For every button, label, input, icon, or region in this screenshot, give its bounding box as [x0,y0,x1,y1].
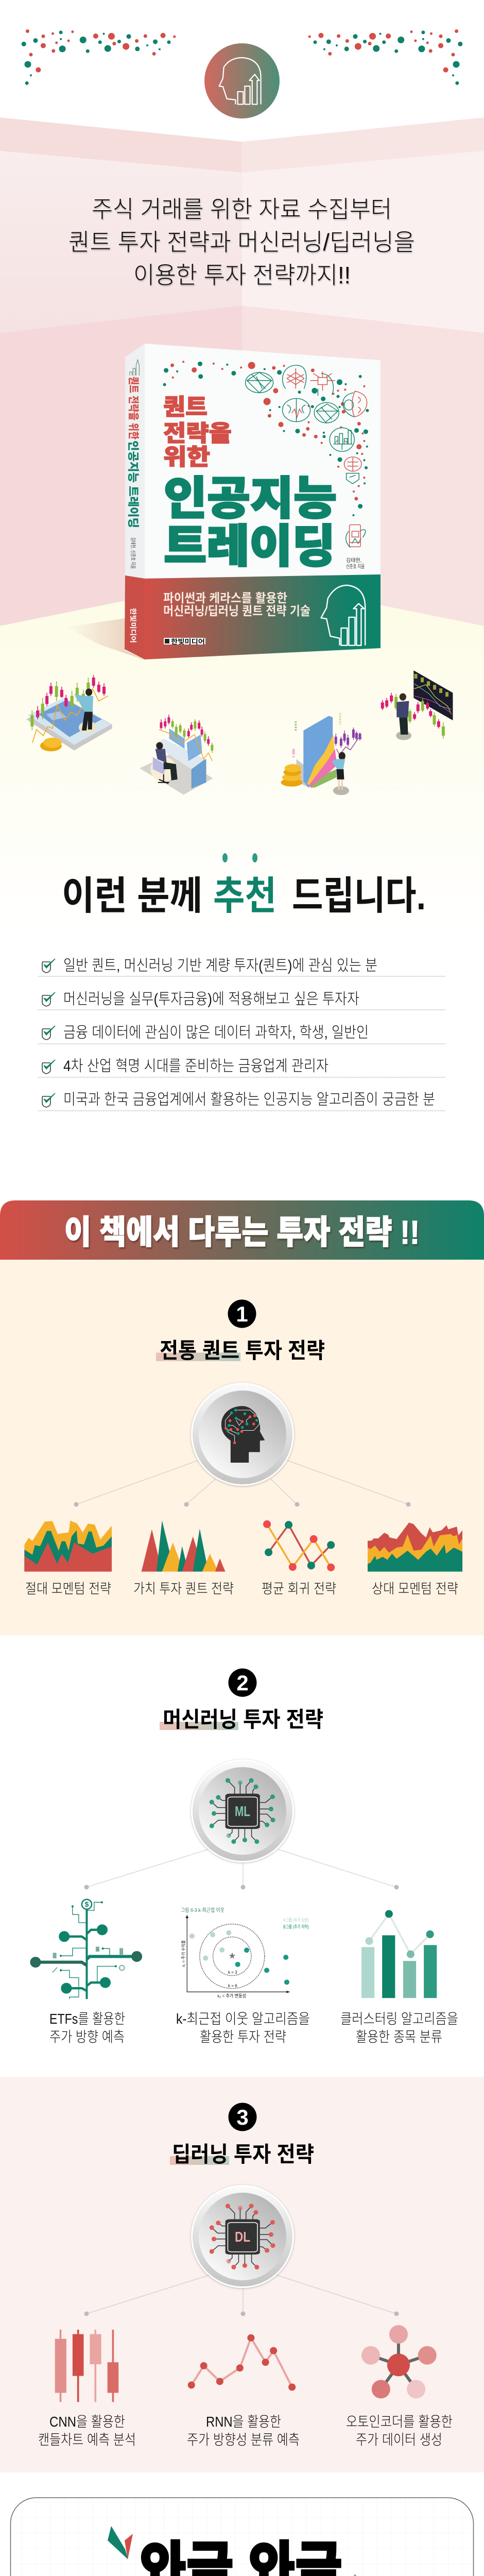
number badge 3 [229,2103,256,2131]
cover title: 위한 [163,445,210,470]
banner heading: 이 책에서 다루는 투자 전략 !! [64,1214,420,1251]
number badge 1: 1 [236,1302,248,1326]
book spine: 한빛미디어 [129,608,137,643]
panel: machine learning strategies [36,1668,458,2045]
connector lines 2 [84,1850,399,1890]
chart: ETF tree: $ [85,1900,89,1908]
heading: strategy 2: 머신러닝 투자 전략 [163,1707,323,1732]
icon: head with rising chart [204,43,280,118]
chart: k nearest neighbours: 활용한 투자 전략 [200,2029,286,2045]
icon: head disc [191,1383,294,1486]
checklist item 4: 4차 산업 혁명 시대를 준비하는 금융업계 관리자 [63,1058,329,1075]
chart: candlesticks [38,2330,136,2448]
cover head icon [321,585,365,646]
chart: clustering bars: 활용한 종목 분류 [356,2029,442,2045]
heading: recommended readers [62,853,426,918]
book spine: 김태현, 신준호 지음 [130,537,136,569]
checklist item 3: 금융 데이터에 관심이 많은 데이터 과학자, 학생, 일반인 [63,1024,369,1041]
panel: reader reviews [10,2498,474,2576]
chart: candlesticks: 캔들차트 예측 분석 [38,2432,136,2448]
chart: ETF tree: ETFs를 활용한 [49,2011,125,2027]
heading: reviews title [108,2526,374,2576]
decoration: dots right [309,31,460,83]
chart: mean reversion [262,1524,336,1597]
cover publisher logo: 한빛미디어 [171,638,205,646]
chart: ETF tree: 주가 방향 예측 [49,2029,125,2045]
icon: ML chip disc: ML [235,1803,250,1819]
chart: relative momentum: 상대 모멘텀 전략 [372,1581,458,1597]
text block: hero copy [68,196,415,289]
illustration: analyst at phone chart [281,713,362,795]
connector lines 1 [74,1461,411,1506]
chart: value investing [133,1520,234,1597]
heading: strategy 3: 딥러닝 투자 전략 [172,2142,314,2166]
text block: hero copy: 퀀트 투자 전략과 머신러닝/딥러닝을 [68,229,415,256]
cover subtitle [163,591,310,618]
text block: hero copy: 이용한 투자 전략까지!! [133,262,351,289]
heading: recommended readers: 이런 분께 [62,874,202,918]
cover title [163,395,365,572]
cover subtitle: 머신러닝/딥러닝 퀀트 전략 기술 [163,604,310,618]
chart: k nearest neighbours: ★ [229,1952,236,1960]
chart: absolute momentum [24,1520,112,1597]
heading: recommended readers: 드립니다. [292,874,426,918]
decoration: dots left [24,31,175,83]
cover title: 신준호 지음 [346,564,365,570]
cover subtitle: 파이썬과 케라스를 활용한 [163,591,287,605]
text block: hero copy: 주식 거래를 위한 자료 수집부터 [92,196,392,223]
book cover [67,344,381,660]
chart: RNN line: RNN을 활용한 [206,2414,281,2430]
cover title: 퀀트 [163,395,208,420]
checklist item 5: 미국과 한국 금융업계에서 활용하는 인공지능 알고리즘이 궁금한 분 [63,1091,435,1108]
chart: clustering bars [340,1914,458,2045]
heading: strategy 1: 전통 퀀트 투자 전략 [160,1338,325,1363]
cover art: brain icons [246,365,367,548]
icon: ML chip disc [191,1759,294,1862]
illustration: trader at desk [140,715,213,794]
book front [145,344,381,579]
chart: k nearest neighbours: B그룹 (주가 하락) [283,1924,309,1929]
cover title: 트레이딩 [164,521,335,572]
chart: k nearest neighbours: k = 3 [228,1970,237,1975]
heading emphasis: 추천 [213,874,276,918]
banner heading [0,1200,484,1260]
panel: traditional quant strategies [0,1260,484,1635]
chart: autoencoder network: 오토인코더를 활용한 [346,2414,453,2430]
chart: k nearest neighbours: 그림 6-3 k-최근접 이웃 [181,1907,224,1913]
number badge 3: 3 [236,2105,249,2129]
illustration: investor on tablet [26,675,112,751]
cover art: dots [165,362,367,515]
connector lines 3 [84,2275,399,2316]
chart: k nearest neighbours [176,1907,310,2045]
chart: ETF tree [36,1900,137,2045]
chart: autoencoder network [346,2334,453,2448]
panel: hero background [0,0,484,933]
chart: value investing: 가치 투자 퀀트 전략 [133,1581,234,1597]
chart: k nearest neighbours: x₁ = 주가 수익률 [181,1940,186,1967]
book spine: 퀀트 전략을 위한 [127,377,139,439]
chart: k nearest neighbours: A그룹 (주가 상승) [283,1918,309,1923]
chart: absolute momentum: 절대 모멘텀 전략 [25,1581,111,1597]
checklist item 2: 머신러닝을 실무(투자금융)에 적용해보고 싶은 투자자 [63,991,359,1008]
illustration: analyst by dark board [383,670,453,740]
book spine: 인공지능 트레이딩 [127,440,140,528]
chart: autoencoder network: 주가 데이터 생성 [356,2432,442,2448]
icon: DL chip disc [191,2185,294,2288]
chart: k nearest neighbours: x₂ = 주가 변동성 [217,1993,246,1998]
chart: RNN line: 주가 방향성 분류 예측 [187,2432,300,2448]
chart: k nearest neighbours: k-최근접 이웃 알고리즘을 [176,2011,310,2027]
chart: clustering bars: 클러스터링 알고리즘을 [340,2011,458,2027]
checklist item 1: 일반 퀀트, 머신러닝 기반 계량 투자(퀀트)에 관심 있는 분 [63,957,377,974]
chart: k nearest neighbours: k = 6 [228,1984,237,1988]
number badge 1 [228,1299,256,1328]
cover title: 김태현, [346,557,361,564]
chart: mean reversion: 평균 회귀 전략 [262,1581,336,1597]
number badge 2 [229,1668,256,1697]
book spine [125,344,145,659]
panel: deep learning strategies [0,2077,484,2472]
chart: RNN line [187,2338,300,2448]
chart: candlesticks: CNN을 활용한 [49,2414,125,2430]
chart: relative momentum [368,1522,462,1597]
cover title: 전략을 [163,421,232,446]
number badge 2: 2 [236,1671,249,1695]
icon: DL chip disc: DL [235,2229,250,2245]
checklist [38,957,446,1111]
cover title: 인공지능 [164,473,337,524]
